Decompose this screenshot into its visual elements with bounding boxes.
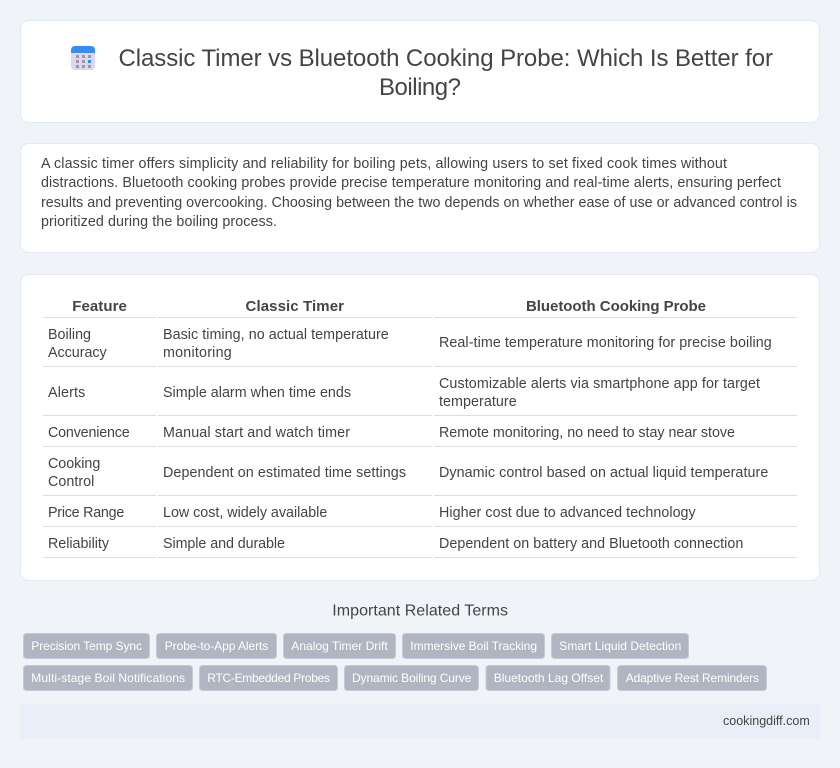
related term tags — [24, 634, 766, 690]
table header row: Classic Timer — [246, 298, 344, 315]
row: convenience: Convenience — [48, 425, 130, 441]
row: boiling accuracy: Basic timing, no actual temperature — [163, 327, 389, 343]
summary text: results and preventing overcooking. Choosing between the two depends on whether ease of use or advanced control is — [41, 195, 797, 211]
row: alerts: Simple alarm when time ends — [163, 385, 351, 401]
related term tags: Immersive Boil Tracking — [410, 639, 537, 653]
row: boiling accuracy — [48, 327, 772, 361]
related term tags: Precision Temp Sync — [31, 639, 142, 653]
summary text: prioritized during the boiling process. — [41, 214, 277, 230]
row: reliability: Reliability — [48, 536, 110, 552]
table header row: Feature — [72, 298, 127, 315]
row: convenience: Remote monitoring, no need to stay near stove — [439, 425, 735, 441]
related term tags: Dynamic Boiling Curve — [352, 671, 472, 685]
row: convenience — [48, 425, 735, 441]
row: cooking control: Dependent on estimated time settings — [163, 465, 406, 481]
panel: comparison table — [20, 274, 820, 580]
related term tags: Analog Timer Drift — [291, 639, 388, 653]
related term tags: Bluetooth Lag Offset — [494, 671, 604, 685]
row: boiling accuracy: Real-time temperature monitoring for precise boiling — [439, 335, 772, 351]
summary text: distractions. Bluetooth cooking probes provide precise temperature monitoring and real-time alerts, ensuring perfect — [41, 175, 781, 191]
related term tags: Adaptive Rest Reminders — [626, 671, 759, 685]
row: price range — [48, 505, 697, 521]
row: cooking control: Cooking — [48, 456, 100, 472]
related term tags: Probe-to-App Alerts — [165, 639, 268, 653]
row: price range: Price Range — [48, 505, 124, 521]
comparison table — [43, 298, 797, 558]
icon: calendar — [71, 46, 95, 70]
related term tags: Multi-stage Boil Notifications — [31, 671, 185, 685]
title: Classic Timer vs Bluetooth Cooking Probe: Which Is Better for — [118, 45, 773, 72]
table header row: Bluetooth Cooking Probe — [526, 298, 706, 315]
summary text — [41, 156, 797, 230]
row: boiling accuracy: Boiling — [48, 327, 91, 343]
row: alerts — [48, 376, 760, 410]
row: alerts: Customizable alerts via smartphone app for target — [439, 376, 760, 392]
row: cooking control — [48, 456, 768, 490]
row: alerts: Alerts — [48, 385, 85, 401]
related term tags: RTC-Embedded Probes — [207, 671, 330, 685]
panel: title card — [20, 20, 820, 122]
row: boiling accuracy: Accuracy — [48, 345, 108, 361]
row: reliability — [48, 536, 743, 552]
row: boiling accuracy: monitoring — [163, 345, 232, 361]
footer bar — [20, 704, 820, 738]
title: Boiling? — [379, 74, 461, 101]
related term tags: Smart Liquid Detection — [559, 639, 681, 653]
row: cooking control: Dynamic control based on actual liquid temperature — [439, 465, 768, 481]
panel: summary — [20, 144, 820, 252]
summary text: A classic timer offers simplicity and reliability for boiling pets, allowing users to set fixed cook times without — [41, 156, 727, 172]
row: convenience: Manual start and watch timer — [163, 425, 350, 441]
heading: related terms: Important Related Terms — [332, 602, 508, 620]
table header row — [72, 298, 706, 315]
title — [118, 45, 773, 101]
footer source: cookingdiff.com — [723, 714, 810, 728]
row: alerts: temperature — [439, 394, 517, 410]
row: reliability: Simple and durable — [163, 536, 285, 552]
row: price range: Low cost, widely available — [163, 505, 327, 521]
row: price range: Higher cost due to advanced technology — [439, 505, 697, 521]
row: reliability: Dependent on battery and Bluetooth connection — [439, 536, 743, 552]
row: cooking control: Control — [48, 474, 94, 490]
